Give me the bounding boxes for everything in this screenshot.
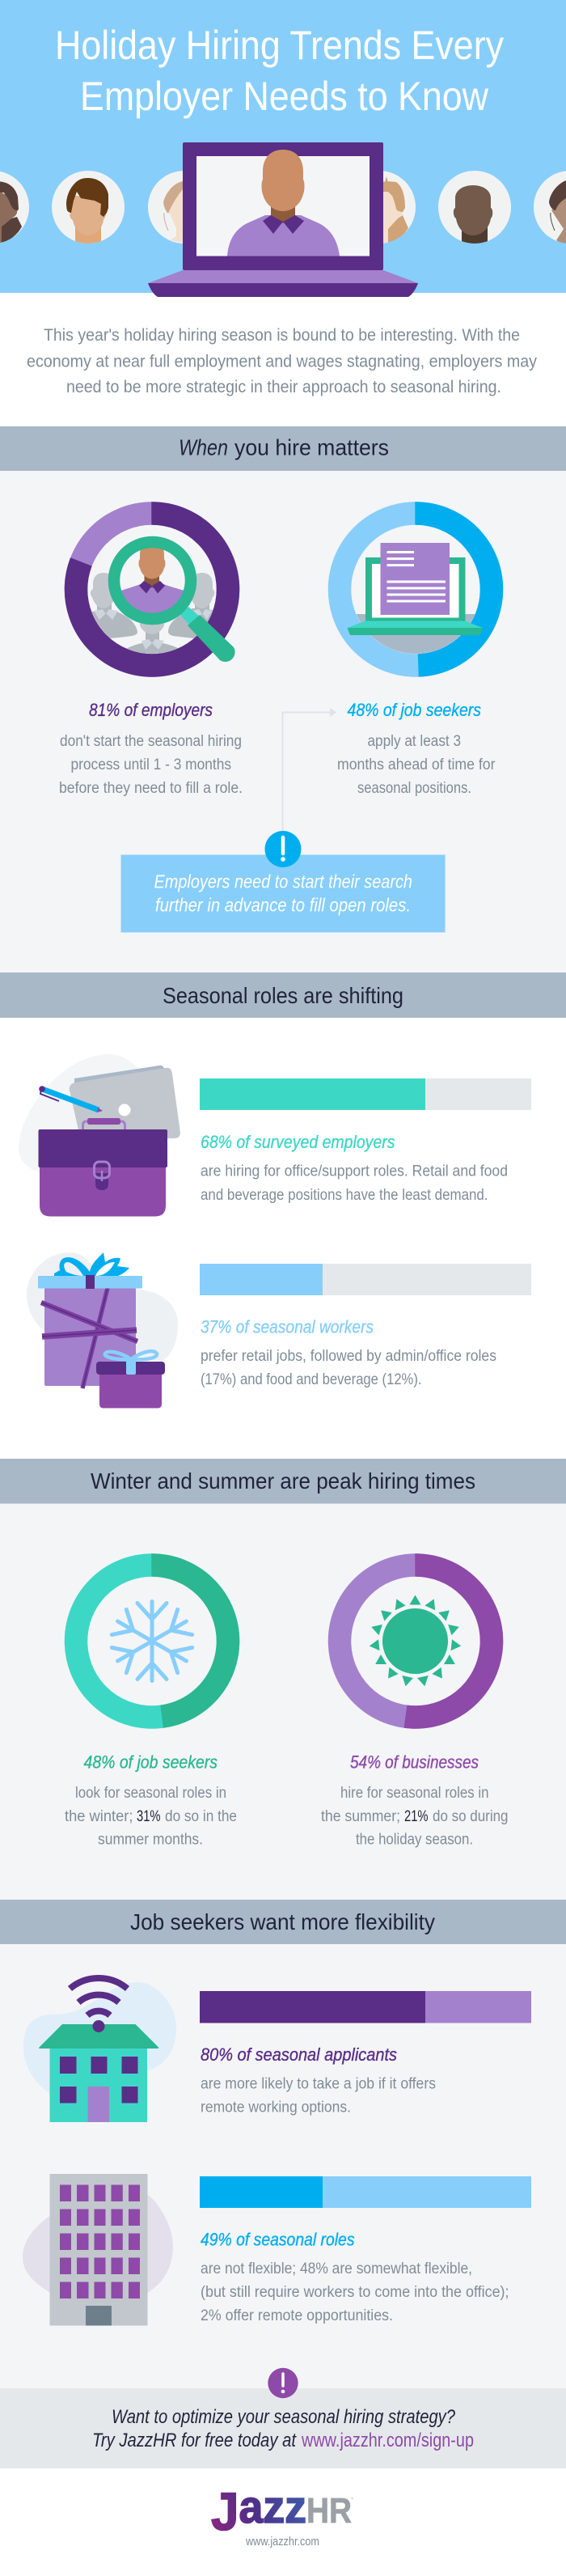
text: 68% of surveyed employers: and beverage positions have the least demand. <box>201 1187 488 1204</box>
text: 49% of seasonal roles: (but still require workers to come into the office); <box>201 2284 509 2301</box>
text: 37% of seasonal workers: 37% of seasonal workers <box>201 1317 374 1337</box>
text: 54% of businesses: 21% <box>404 1808 429 1825</box>
logo: JazzHR: ™ <box>350 2497 353 2501</box>
text: 54% of businesses <box>321 1752 508 1848</box>
heading: When you hire matters: When <box>179 435 228 460</box>
icon: exclamation <box>268 2368 298 2398</box>
icon: snowflake <box>111 1602 193 1681</box>
panel: hero header <box>0 0 566 297</box>
text: 81% of employers: before they need to fill a role. <box>59 780 243 797</box>
bar chart: 49% <box>200 2176 531 2208</box>
logo: JazzHR <box>211 2481 353 2541</box>
logo: JazzHR: J <box>211 2481 239 2541</box>
text: 48% of job seekers winter <box>65 1752 237 1848</box>
chart: 81% donut with magnifier <box>76 513 235 665</box>
icon: laptop with candidate <box>148 142 418 297</box>
callout: start earlier: Employers need to start their search <box>154 871 412 892</box>
text: 80% of seasonal applicants <box>201 2044 436 2116</box>
icon: magnifier handle <box>180 607 235 662</box>
text: 80% of seasonal applicants: remote working options. <box>201 2099 351 2116</box>
text: 37% of seasonal workers: prefer retail jobs, followed by admin/office roles <box>201 1348 496 1365</box>
icon: briefcase <box>19 1054 180 1217</box>
text: 48% of job seekers: 48% of job seekers <box>348 700 481 720</box>
panel: call to action <box>0 2368 566 2468</box>
text: 54% of businesses: the holiday season. <box>356 1832 473 1848</box>
text: 48% of job seekers winter: 48% of job seekers <box>84 1752 218 1772</box>
icon: office building <box>23 2174 173 2325</box>
logo: JazzHR: HR <box>306 2491 352 2531</box>
text: 68% of surveyed employers: are hiring for office/support roles. Retail and food <box>201 1163 508 1180</box>
title <box>55 23 504 119</box>
text: 68% of surveyed employers: 68% of surveyed employers <box>201 1132 395 1152</box>
text: CTA <box>92 2406 474 2451</box>
text: 49% of seasonal roles <box>201 2230 509 2324</box>
title: Holiday Hiring Trends Every <box>55 23 504 68</box>
text: CTA: Want to optimize your seasonal hiring strategy? <box>112 2406 456 2428</box>
text: 80% of seasonal applicants: are more likely to take a job if it offers <box>201 2076 436 2092</box>
text: 48% of job seekers: seasonal positions. <box>357 780 471 797</box>
intro text: economy at near full employment and wages stagnating, employers may <box>27 353 537 371</box>
text: 48% of job seekers: apply at least 3 <box>367 733 461 750</box>
panel: when you hire matters <box>59 513 496 932</box>
text: 48% of job seekers winter: do so in the <box>165 1808 237 1825</box>
callout: start earlier <box>121 831 445 932</box>
text: 49% of seasonal roles: 49% of seasonal roles <box>201 2230 354 2249</box>
text: 37% of seasonal workers: (17%) and food and beverage (12%). <box>201 1371 422 1388</box>
bar chart: 37% <box>200 1264 531 1295</box>
panel: seasonal roles <box>19 1054 531 1408</box>
text: 37% of seasonal workers <box>201 1317 496 1388</box>
text: 68% of surveyed employers <box>201 1132 508 1204</box>
text: 49% of seasonal roles: 2% offer remote opportunities. <box>201 2307 393 2324</box>
text: 48% of job seekers winter: the winter; <box>65 1808 133 1825</box>
heading: Seasonal roles are shifting: Seasonal roles are shifting <box>163 983 403 1008</box>
icon: exclamation <box>265 831 301 867</box>
text: 81% of employers: process until 1 - 3 months <box>71 756 231 773</box>
heading: Winter and summer are peak hiring times: Winter and summer are peak hiring times <box>91 1468 475 1493</box>
text: CTA: Try JazzHR for free today at <box>92 2430 297 2451</box>
icon: candidate on screen <box>227 150 340 256</box>
chart: 48% donut with laptop <box>340 513 492 665</box>
heading: Seasonal roles are shifting <box>0 972 566 1018</box>
icon: laptop with job posting <box>348 543 483 635</box>
text: 48% of job seekers winter: look for seasonal roles in <box>75 1785 226 1802</box>
text: 80% of seasonal applicants: 80% of seasonal applicants <box>201 2044 397 2065</box>
callout: start earlier: further in advance to fill open roles. <box>155 895 411 916</box>
icon: house with wifi <box>23 1978 176 2122</box>
icon: candidate in lens <box>121 548 184 613</box>
text: 81% of employers: 81% of employers <box>89 700 213 720</box>
heading: Winter and summer are peak hiring times <box>0 1459 566 1503</box>
text: 81% of employers: don't start the seasonal hiring <box>60 733 242 750</box>
heading: When you hire matters <box>0 426 566 471</box>
bar chart: 80% <box>200 1991 531 2023</box>
logo: JazzHR: azz <box>239 2481 306 2533</box>
bar chart: 68% <box>200 1078 531 1110</box>
text: 49% of seasonal roles: are not flexible; 48% are somewhat flexible, <box>201 2260 472 2277</box>
text: 54% of businesses: do so during <box>433 1808 508 1825</box>
arrow: connector <box>283 708 336 833</box>
intro text: need to be more strategic in their approach to seasonal hiring. <box>66 378 501 396</box>
intro text: This year's holiday hiring season is bound to be interesting. With the <box>44 326 520 345</box>
icon: magnifier ring <box>114 542 191 619</box>
chart: 54% summer donut <box>340 1565 492 1717</box>
panel: flexibility <box>23 1978 531 2325</box>
heading: When you hire matters: you hire matters <box>234 435 389 460</box>
intro text <box>27 326 537 396</box>
text: CTA: www.jazzhr.com/sign-up <box>301 2430 474 2451</box>
heading: Job seekers want more flexibility: Job seekers want more flexibility <box>130 1909 435 1934</box>
row of candidate avatars <box>0 171 566 247</box>
icon: sun <box>369 1595 462 1688</box>
panel: peak hiring times <box>65 1565 508 1848</box>
text: website: www.jazzhr.com <box>245 2536 319 2548</box>
heading: Job seekers want more flexibility <box>0 1900 566 1944</box>
icon: gift boxes <box>27 1252 178 1408</box>
text: 48% of job seekers winter: 31% <box>137 1808 161 1825</box>
icon: grey candidates <box>87 573 217 657</box>
text: 81% of employers <box>59 700 243 797</box>
text: 54% of businesses: hire for seasonal roles in <box>340 1785 488 1802</box>
text: 48% of job seekers: months ahead of time for <box>337 756 496 773</box>
title: Employer Needs to Know <box>80 74 489 119</box>
text: 48% of job seekers <box>337 700 496 797</box>
text: 54% of businesses: the summer; <box>321 1808 400 1825</box>
chart: 48% winter donut <box>76 1565 228 1717</box>
text: 54% of businesses: 54% of businesses <box>350 1752 479 1772</box>
text: 48% of job seekers winter: summer months. <box>98 1832 203 1848</box>
